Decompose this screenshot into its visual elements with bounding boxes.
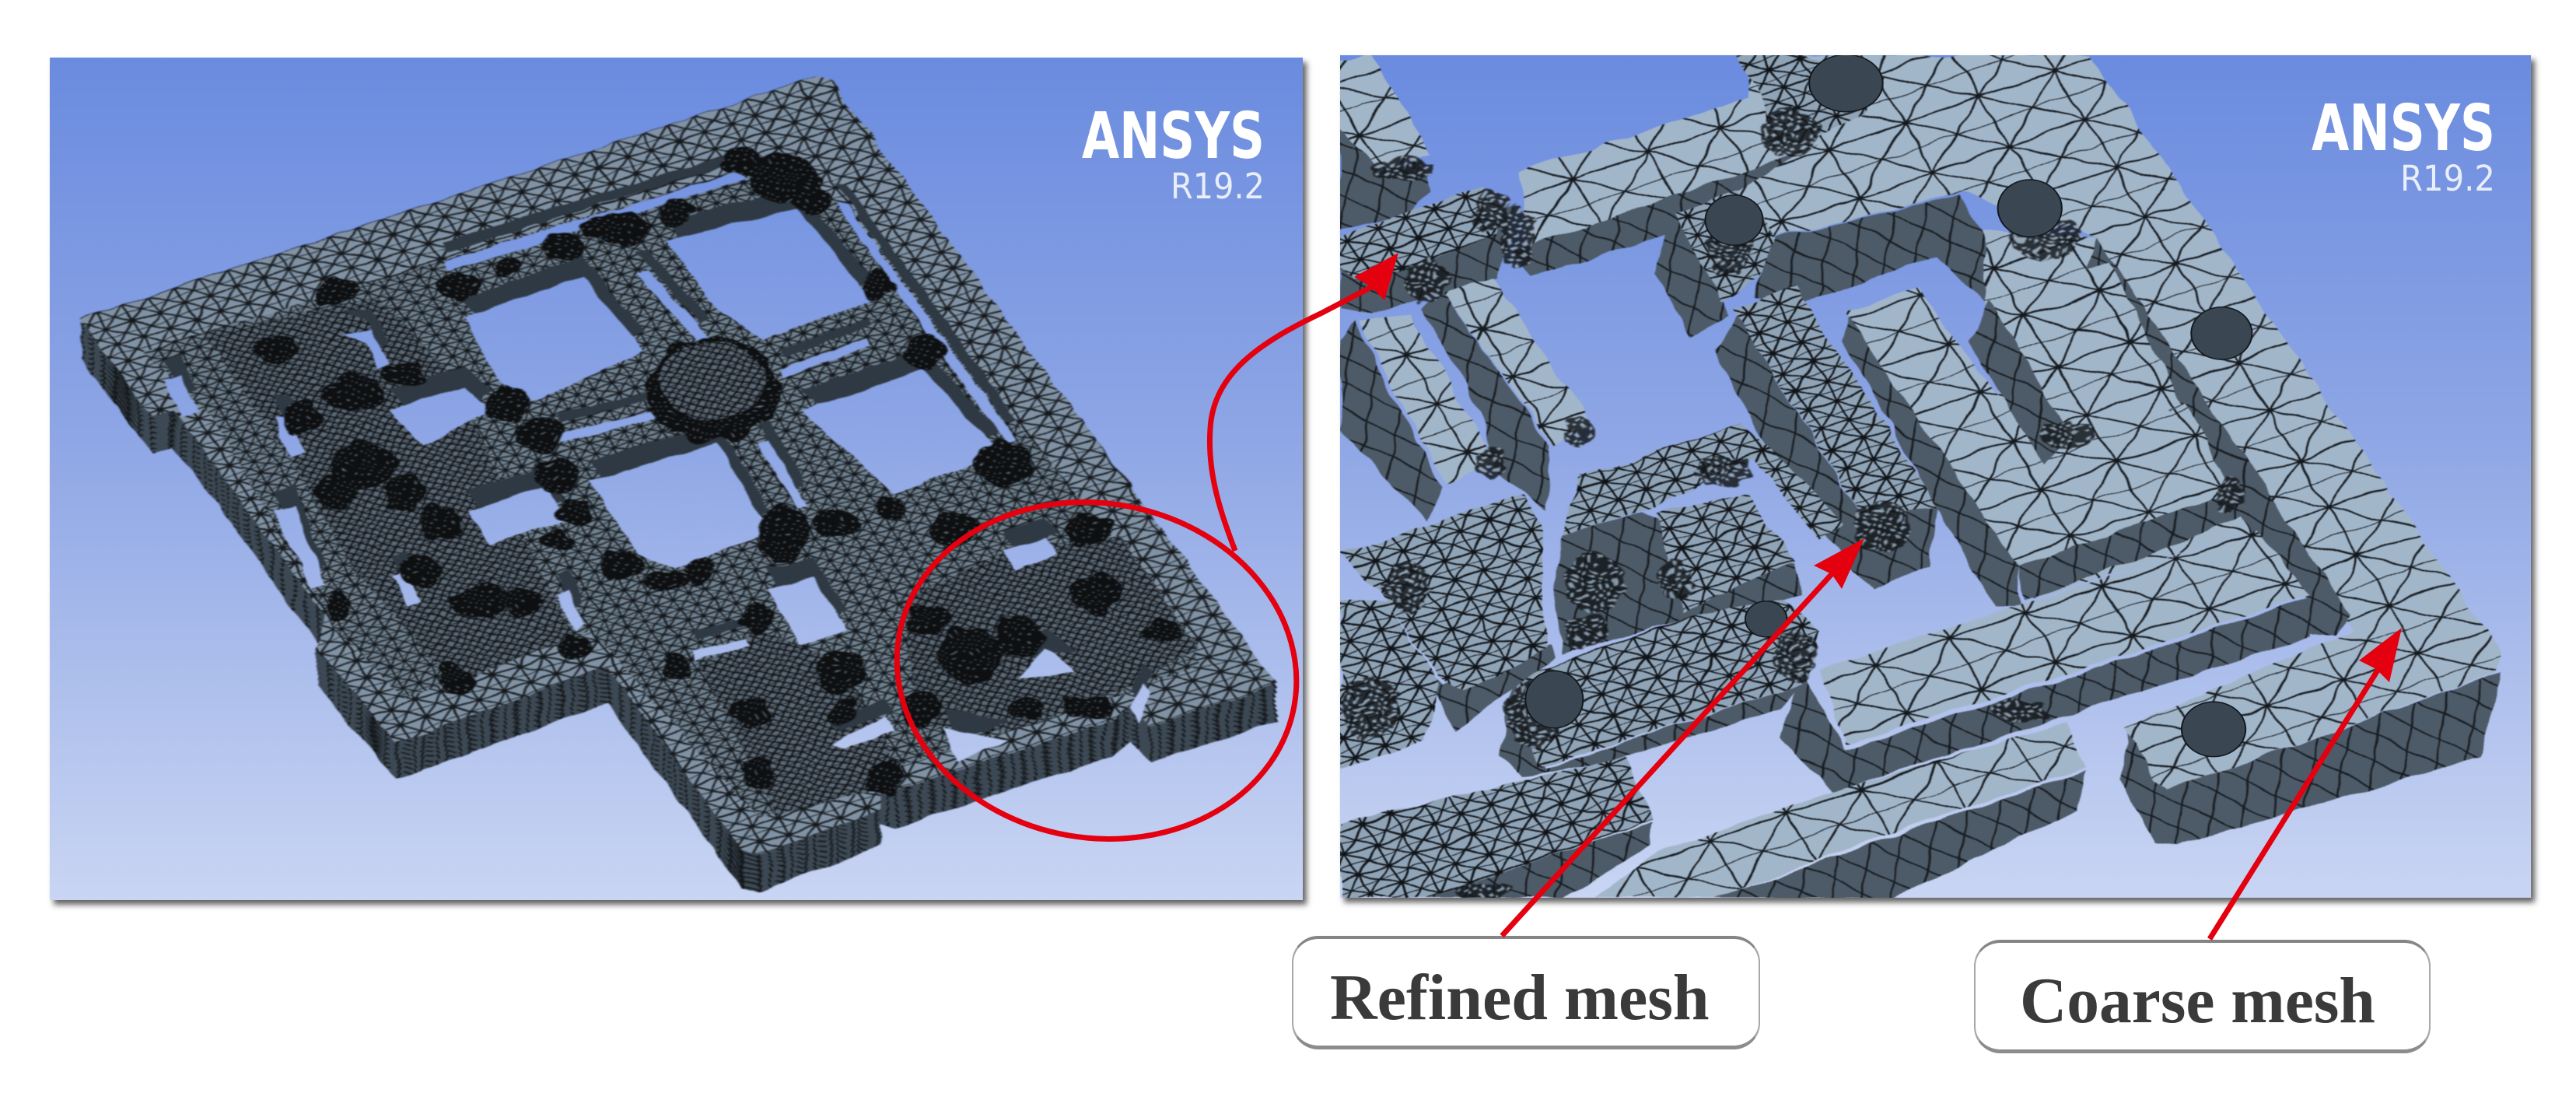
label text: refined mesh: Refined mesh bbox=[1330, 962, 1710, 1034]
upper arm side bbox=[1510, 143, 1818, 277]
lower left block top bbox=[1340, 494, 1546, 691]
upper left bar side bbox=[1340, 125, 1430, 229]
junction top bbox=[1340, 187, 1503, 280]
bottom left side bbox=[1426, 821, 1654, 898]
raised block wall bbox=[1970, 300, 2070, 464]
label: coarse mesh bbox=[1974, 940, 2431, 1053]
logo wordmark: R19.2 bbox=[2400, 158, 2495, 199]
left bar two side bbox=[1423, 292, 1550, 509]
arrow: refined mesh bbox=[1502, 538, 1864, 936]
label: refined mesh bbox=[1292, 936, 1760, 1049]
upper arm top bbox=[1518, 98, 1770, 244]
upper knot top bbox=[1738, 55, 1882, 149]
part top face mesh bbox=[80, 77, 1277, 855]
raised block top bbox=[1990, 262, 2182, 440]
U shape top bbox=[1563, 422, 1842, 541]
lower bar top bbox=[1818, 530, 2309, 744]
inner block bottom wall bbox=[2018, 491, 2242, 601]
frame side wall bbox=[2120, 673, 2501, 846]
middle bar top bbox=[1514, 595, 1822, 768]
frame floor bbox=[1982, 229, 2309, 601]
frame inner wall bbox=[2082, 238, 2350, 634]
bar three end bbox=[1850, 506, 1938, 590]
mounting holes bbox=[1525, 54, 2252, 757]
junction side bbox=[1340, 202, 1514, 315]
junction block side bbox=[1654, 208, 1730, 336]
left bar one top bbox=[1359, 315, 1494, 485]
bar three side bbox=[1714, 315, 1866, 574]
arrow: ellipse to detail bbox=[1209, 253, 1398, 551]
bottom strip side bbox=[1714, 771, 2086, 898]
middle bar side bbox=[1498, 678, 1802, 777]
upper wall bbox=[1754, 196, 1986, 303]
refined mesh clusters bbox=[257, 146, 1182, 796]
logo wordmark bbox=[1082, 100, 1265, 207]
lower bar side bbox=[1782, 598, 2309, 792]
lower left block side bbox=[1426, 646, 1554, 732]
refined mesh patches bbox=[1342, 109, 2244, 897]
left bar two top bbox=[1443, 280, 1591, 447]
bottom strip top bbox=[1594, 723, 2086, 898]
central cluster base bbox=[1554, 512, 1802, 655]
window walls bbox=[164, 152, 1151, 741]
junction block top bbox=[1675, 191, 1778, 303]
logo: ANSYS right bbox=[2312, 92, 2495, 199]
inner block left wall bbox=[1842, 315, 2021, 607]
window openings bbox=[164, 173, 1151, 762]
fine mesh area bottom bbox=[700, 631, 894, 815]
callout ellipse bbox=[870, 471, 1323, 871]
fine mesh area lower left bbox=[202, 297, 573, 684]
logo wordmark bbox=[2312, 92, 2495, 199]
part side walls bbox=[80, 82, 1277, 892]
part mesh body bbox=[80, 77, 1277, 892]
arrow: coarse mesh bbox=[2210, 628, 2402, 939]
panel: zoomed mesh detail bbox=[1340, 55, 2531, 898]
bottom left top bbox=[1340, 756, 1654, 898]
logo: ANSYS left bbox=[1082, 100, 1265, 207]
logo wordmark: R19.2 bbox=[1171, 166, 1265, 207]
meshed part detail bbox=[1340, 55, 2502, 898]
central hub refined mesh bbox=[660, 342, 765, 420]
panel: full part mesh bbox=[50, 58, 1303, 900]
inner block top bbox=[1846, 287, 2234, 566]
frame top face bbox=[1730, 55, 2501, 789]
meshed part overview bbox=[79, 75, 1279, 893]
detail mesh body bbox=[1340, 55, 2501, 898]
lower left bar bbox=[1340, 601, 1438, 768]
centre block top bbox=[1658, 494, 1794, 613]
inner region medium mesh bbox=[143, 170, 1202, 818]
fine mesh area lower right bbox=[902, 535, 1197, 732]
left bar one side bbox=[1340, 321, 1443, 521]
bar three top bbox=[1734, 286, 1938, 524]
label text: coarse mesh: Coarse mesh bbox=[2020, 965, 2375, 1037]
upper left bar top bbox=[1340, 55, 1430, 173]
